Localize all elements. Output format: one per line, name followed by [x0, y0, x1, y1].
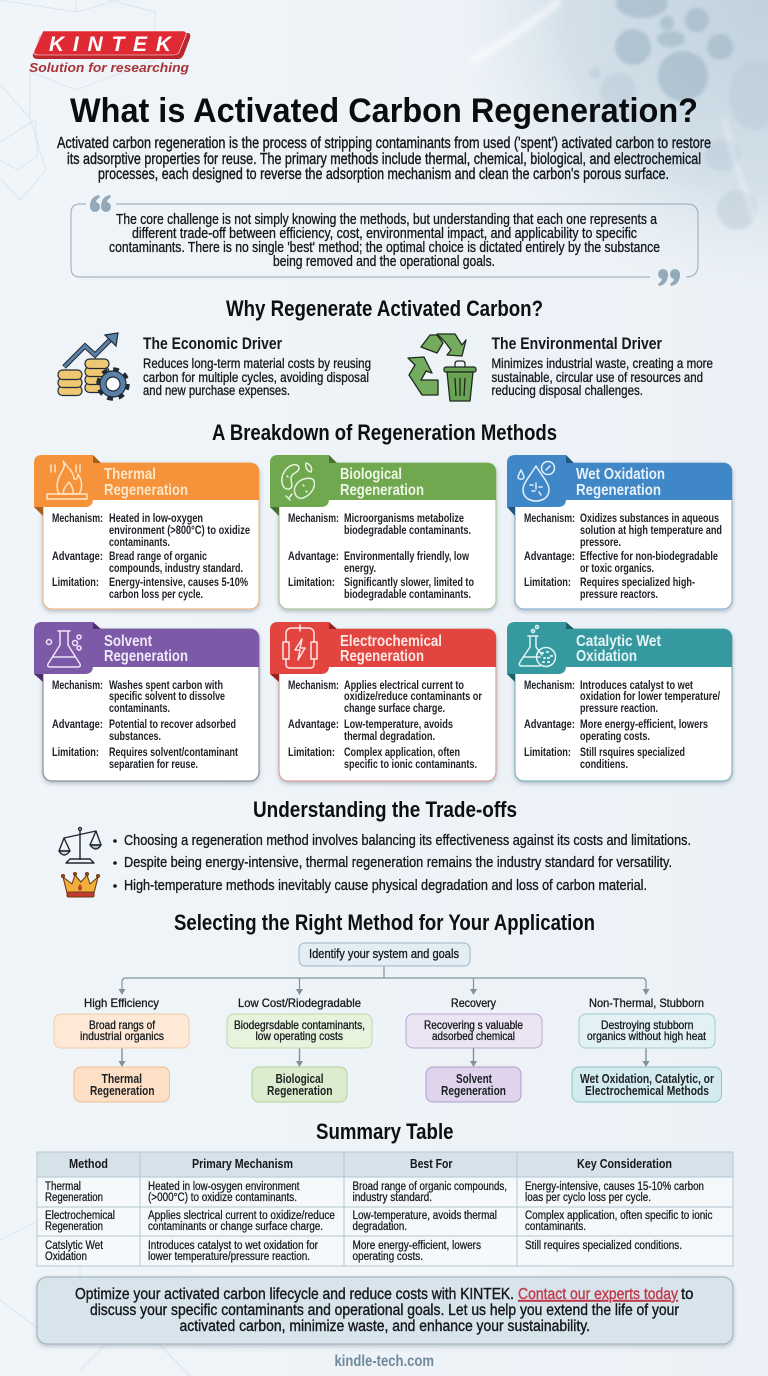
solvent title: Regeneration	[104, 648, 188, 665]
economic driver text: carbon for multiple cycles, avoiding disposal	[143, 370, 369, 385]
electrochemical details: Mechanism:	[288, 680, 339, 692]
icon: microbes	[282, 463, 314, 500]
call to action text: Contact our experts today	[518, 1286, 678, 1303]
catalytic details: Advantage:	[524, 719, 575, 731]
thermal details: Limitation:	[52, 577, 99, 589]
table header row: Primary Mechanism	[192, 1156, 293, 1171]
biological details: energy.	[344, 563, 376, 575]
logo: KINTEK: KINTEK	[49, 33, 173, 56]
table header row: Key Consideration	[577, 1156, 672, 1171]
branch: low cost biodegradable: low operating costs	[256, 1029, 343, 1043]
solvent details: substances.	[109, 731, 161, 743]
biological details: Environmentally friendly, low	[344, 551, 469, 563]
thermal details: environment (>800°C) to oxidize	[109, 525, 250, 537]
wet oxidation details: Oxidizes substances in aqueous	[580, 513, 719, 525]
logo: KINTEK: Solution for researching	[29, 60, 189, 75]
branch labels: Non-Thermal, Stubborn	[589, 996, 704, 1010]
call to action text: Optimize your activated carbon lifecycle and reduce costs with KINTEK.	[75, 1286, 514, 1303]
table row: thermal: industry standard.	[352, 1192, 432, 1204]
biological details: Significantly slower, limited to	[344, 577, 474, 589]
branch labels: Low Cost/Riodegradable	[238, 996, 361, 1010]
heading: selecting method: Selecting the Right Method for Your Application	[174, 910, 595, 935]
wet oxidation details: solution at high temperature and	[580, 525, 722, 537]
branch: non-thermal stubborn: organics without high heat	[587, 1029, 707, 1043]
thermal details: Mechanism:	[52, 513, 103, 525]
table row: catalytic: Introduces catalyst to wet oxidation for	[148, 1240, 318, 1252]
economic driver text: Reduces long-term material costs by reusing	[143, 356, 371, 371]
table row: electrochemical: contaminants.	[525, 1221, 586, 1233]
table row: thermal	[45, 1181, 704, 1204]
biological details: Microorganisms metabolize	[344, 513, 464, 525]
wet oxidation details: pressure reactors.	[580, 589, 658, 601]
icon: coins, arrow and gear	[58, 333, 127, 398]
panel: biological regeneration card	[270, 455, 496, 609]
biological title	[340, 466, 424, 499]
branch: recovery: Solvent	[456, 1071, 493, 1086]
branch: non-thermal stubborn: Wet Oxidation, Catalytic, or	[580, 1071, 714, 1086]
trade-off bullet list: Despite being energy-intensive, thermal regeneration remains the industry standard for versatility.	[124, 855, 672, 871]
branch: recovery: adsorbed chemical	[432, 1029, 515, 1043]
table row: thermal: Regeneration	[45, 1192, 103, 1204]
branch: high efficiency: Thermal	[102, 1071, 142, 1086]
wet oxidation details: Limitation:	[524, 577, 571, 589]
branch: high efficiency: Regeneration	[90, 1083, 155, 1098]
environmental driver text: reducing disposal challenges.	[492, 383, 643, 398]
electrochemical title	[340, 633, 442, 665]
heading: why regenerate: Why Regenerate Activated Carbon?	[226, 296, 543, 321]
flowchart: decision tree	[54, 943, 722, 1102]
icon: water droplet	[518, 462, 554, 501]
thermal details: contaminants.	[109, 537, 170, 549]
catalytic details: operating costs.	[580, 731, 650, 743]
trade-off bullet list: High-temperature methods inevitably cause physical degradation and loss of carbon material.	[124, 878, 647, 894]
environmental driver text: sustainable, circular use of resources and	[492, 370, 703, 385]
table row: electrochemical	[45, 1210, 713, 1233]
branch: recovery: Recovering s valuable	[424, 1018, 523, 1032]
table row: electrochemical: Electrochemical	[45, 1210, 115, 1222]
panel: environmental driver	[408, 334, 713, 401]
catalytic details: pressure reaction.	[580, 703, 658, 715]
flow root box: Identify your system and goals	[309, 946, 459, 961]
wet oxidation details: Mechanism:	[524, 513, 575, 525]
biological details	[288, 513, 474, 601]
icon: flame	[47, 461, 87, 499]
solvent details: Mechanism:	[52, 680, 103, 692]
panel: solvent regeneration card	[34, 622, 259, 781]
solvent title	[104, 633, 188, 665]
call to action panel	[37, 1277, 733, 1344]
electrochemical details	[288, 680, 482, 771]
wet oxidation details: Effective for non-biodegradable	[580, 551, 718, 563]
table row: electrochemical: degradation.	[352, 1221, 407, 1233]
biological details: biodegradable contaminants.	[344, 589, 471, 601]
solvent details: Potential to recover adsorbed	[109, 719, 236, 731]
heading: trade-offs: Understanding the Trade-offs	[253, 797, 517, 822]
branch: high efficiency	[54, 1014, 189, 1102]
thermal details: Bread range of organic	[109, 551, 207, 563]
thermal title: Regeneration	[104, 482, 188, 499]
icon: electrolysis cell	[283, 625, 317, 668]
catalytic details: More energy-efficient, lowers	[580, 719, 708, 731]
branch: high efficiency: Broad rangs of	[89, 1018, 156, 1032]
table row: electrochemical: Complex application, often specific to ionic	[525, 1210, 713, 1222]
callout: core challenge quote	[71, 195, 698, 286]
logo: KINTEK	[29, 31, 190, 75]
electrochemical details: specific to ionic contaminants.	[344, 759, 477, 771]
summary table	[37, 1152, 733, 1266]
wet oxidation details: or toxic organics.	[580, 563, 654, 575]
callout: core challenge quote: contaminants. There is no single 'best' method; the optimal choice is dictated entirely by the substance	[109, 240, 660, 256]
call to action text: discuss your specific contaminants and operational goals. Let us help you extend the life of your	[90, 1302, 680, 1319]
solvent details: separatien for reuse.	[109, 759, 198, 771]
icon: balance scales	[59, 828, 101, 863]
table row: electrochemical: Low-temperature, avoids thermal	[352, 1210, 497, 1222]
thermal title	[104, 466, 188, 499]
electrochemical title: Electrochemical	[340, 633, 442, 650]
catalytic details: Mechanism:	[524, 680, 575, 692]
economic driver text: and new purchase expenses.	[143, 383, 290, 398]
wet oxidation details	[524, 513, 722, 601]
panel: catalytic wet oxidation card	[507, 622, 732, 781]
footer website: kindle-tech.com	[334, 1353, 434, 1370]
environmental driver text: The Environmental Driver	[492, 335, 662, 353]
branch: non-thermal stubborn: Destroying stubborn	[601, 1018, 694, 1032]
table row: electrochemical: Applies slectrical current to oxidize/reduce	[148, 1210, 335, 1222]
catalytic details	[524, 680, 721, 771]
callout: core challenge quote: being removed and the operational goals.	[273, 254, 495, 270]
callout: core challenge quote: The core challenge is not simply knowing the methods, but understanding that each one represents a	[116, 212, 658, 228]
thermal details: Advantage:	[52, 551, 103, 563]
electrochemical details: oxidize/reduce contaminants or	[344, 691, 482, 703]
biological title: Biological	[340, 466, 402, 483]
icon: opening quote mark	[90, 195, 111, 212]
electrochemical details: Complex application, often	[344, 747, 460, 759]
table header row: Best For	[410, 1156, 452, 1171]
call to action text	[75, 1286, 694, 1335]
table row: electrochemical: Regeneration	[45, 1221, 103, 1233]
flow root box	[299, 943, 470, 966]
wet oxidation title	[576, 466, 665, 499]
branch: non-thermal stubborn	[572, 1014, 722, 1102]
panel: thermal regeneration card	[34, 455, 259, 609]
branch labels: Recovery	[451, 996, 496, 1010]
branch: low cost biodegradable	[227, 1014, 372, 1102]
solvent details: Requires solvent/contaminant	[109, 747, 238, 759]
branch: non-thermal stubborn: Electrochemical Methods	[585, 1083, 709, 1098]
environmental driver text	[492, 335, 713, 398]
branch: recovery	[406, 1014, 542, 1102]
solvent details: Advantage:	[52, 719, 103, 731]
intro paragraph	[57, 135, 711, 183]
icon: catalyst flask	[519, 626, 556, 666]
solvent details: Limitation:	[52, 747, 99, 759]
solvent details	[52, 680, 238, 771]
flow connectors	[118, 966, 650, 1067]
biological details: Advantage:	[288, 551, 339, 563]
table row: thermal: (>000°C) to oxidize contaminants.	[148, 1192, 297, 1204]
wet oxidation details: pressore.	[580, 537, 621, 549]
economic driver text: The Economic Driver	[143, 335, 282, 353]
table row: catalytic: Still requires specialized conditions.	[525, 1240, 682, 1252]
branch: low cost biodegradable: Biological	[276, 1071, 324, 1086]
icon: crown	[62, 872, 100, 897]
title: What is Activated Carbon Regeneration?	[70, 92, 698, 130]
table row: thermal: Heated in low-osygen environment	[148, 1181, 300, 1193]
biological details: biodegradable contaminants.	[344, 525, 471, 537]
table row: thermal: Energy-intensive, causes 15-10% carbon	[525, 1181, 704, 1193]
catalytic details: Still rsquires specialized	[580, 747, 685, 759]
call to action text: to	[681, 1286, 694, 1303]
biological details: Mechanism:	[288, 513, 339, 525]
callout: core challenge quote: different trade-off between efficiency, cost, environmental impact, and applicability to specific	[132, 226, 637, 242]
branch: low cost biodegradable: Biodegrsdable contaminants,	[234, 1018, 365, 1032]
thermal title: Thermal	[104, 466, 156, 483]
electrochemical details: Low-temperature, avoids	[344, 719, 453, 731]
environmental driver text: Minimizes industrial waste, creating a more	[492, 356, 713, 371]
table row: electrochemical: contaminants or change surface charge.	[148, 1221, 323, 1233]
table row: thermal: loas per cyclo loss per cycle.	[525, 1192, 651, 1204]
table row: thermal: Broad range of organic compounds,	[352, 1181, 507, 1193]
electrochemical details: Limitation:	[288, 747, 335, 759]
electrochemical details: change surface charge.	[344, 703, 445, 715]
thermal details: Energy-intensive, causes 5-10%	[109, 577, 248, 589]
branch: recovery: Regeneration	[441, 1083, 506, 1098]
wet oxidation title: Wet Oxidation	[576, 466, 665, 483]
panel: wet oxidation regeneration card	[507, 455, 732, 609]
thermal details: compounds, industry standard.	[109, 563, 243, 575]
panel: electrochemical regeneration card	[270, 622, 496, 781]
branch: high efficiency: industrial organics	[80, 1029, 164, 1043]
economic driver text	[143, 335, 371, 398]
catalytic details: Limitation:	[524, 747, 571, 759]
biological details: Limitation:	[288, 577, 335, 589]
solvent details: specific solvent to dissolve	[109, 691, 225, 703]
thermal details: Heated in low-oxygen	[109, 513, 203, 525]
catalytic details: conditiens.	[580, 759, 628, 771]
table row: catalytic: Oxidation	[45, 1251, 87, 1263]
catalytic title: Catalytic Wet	[576, 633, 661, 650]
electrochemical details: Advantage:	[288, 719, 339, 731]
solvent title: Solvent	[104, 633, 152, 650]
thermal details: carbon loss per cycle.	[109, 589, 203, 601]
biological title: Regeneration	[340, 482, 424, 499]
wet oxidation title: Regeneration	[576, 482, 661, 499]
table row: catalytic: Catslytic Wet	[45, 1240, 104, 1252]
wet oxidation details: Requires specialized high-	[580, 577, 695, 589]
trade-off bullet list: Choosing a regeneration method involves balancing its effectiveness against its costs and limitations.	[124, 833, 691, 849]
catalytic details: oxidation for lower temperature/	[580, 691, 721, 703]
electrochemical title: Regeneration	[340, 648, 424, 665]
electrochemical details: thermal degradation.	[344, 731, 435, 743]
table header row	[69, 1156, 672, 1171]
thermal details	[52, 513, 250, 601]
heading: breakdown: A Breakdown of Regeneration Methods	[212, 420, 557, 445]
branch: low cost biodegradable: Regeneration	[267, 1083, 333, 1098]
catalytic details: Introduces catalyst to wet	[580, 680, 693, 692]
wet oxidation details: Advantage:	[524, 551, 575, 563]
call to action text: activated carbon, minimize waste, and enhance your sustainability.	[180, 1318, 590, 1335]
heading: summary table: Summary Table	[316, 1119, 454, 1144]
catalytic title	[576, 633, 661, 665]
branch labels	[84, 996, 704, 1010]
solvent details: contaminants.	[109, 703, 170, 715]
table row: thermal: Thermal	[45, 1181, 81, 1193]
table row: catalytic: lower temperature/pressure reaction.	[148, 1251, 310, 1263]
icon: recycling arrows and bin	[408, 334, 476, 401]
branch labels: High Efficiency	[84, 996, 159, 1010]
table row: catalytic: operating costs.	[352, 1251, 423, 1263]
panel: economic driver	[58, 333, 371, 398]
electrochemical details: Applies electrical current to	[344, 680, 464, 692]
catalytic title: Oxidation	[576, 648, 637, 665]
icon: flask	[46, 631, 81, 667]
table row: catalytic	[45, 1240, 682, 1263]
table row: catalytic: More energy-efficient, lowers	[352, 1240, 481, 1252]
trade-off bullet list	[113, 833, 691, 894]
solvent details: Washes spent carbon with	[109, 680, 223, 692]
icon: closing quote mark	[658, 269, 680, 286]
table header row: Method	[69, 1156, 108, 1171]
